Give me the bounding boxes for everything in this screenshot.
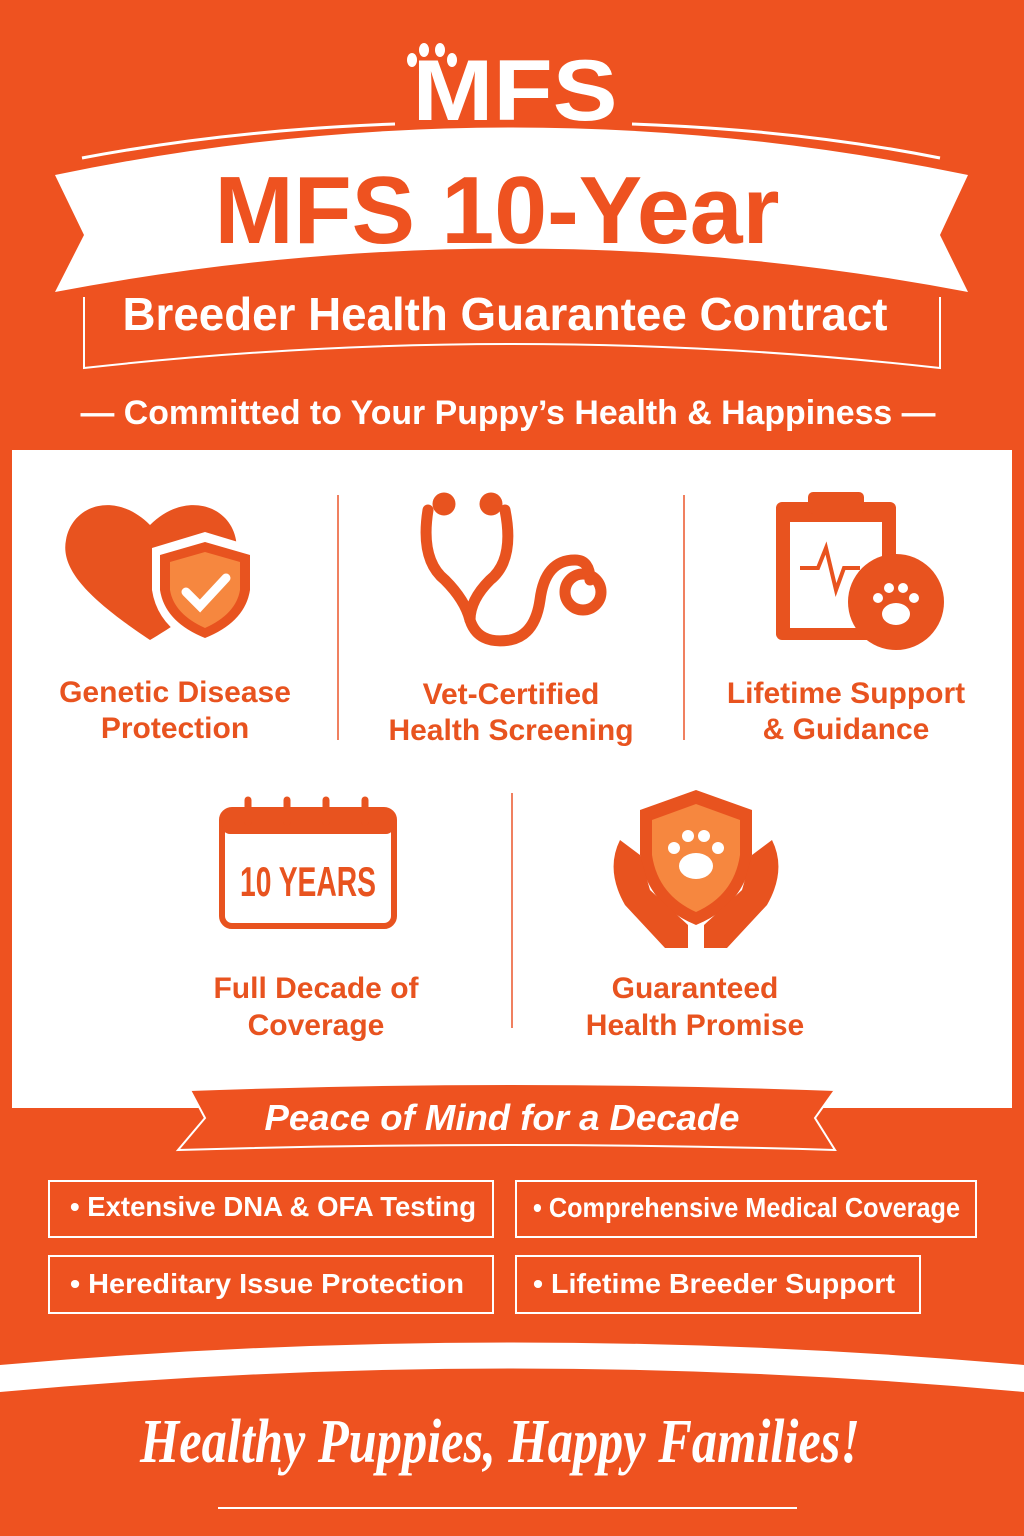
- label: Guaranteed Health Promise: Guaranteed: [612, 972, 778, 1005]
- bullet list text: • Hereditary Issue Protection: [70, 1268, 464, 1299]
- footer slogan: Healthy Puppies, Happy Families!: [139, 1408, 860, 1476]
- label: Full Decade of Coverage: Coverage: [248, 1009, 384, 1042]
- bullet list text: • Comprehensive Medical Coverage: [533, 1192, 960, 1223]
- subtitle box: Breeder Health Guarantee Contract: Breeder Health Guarantee Contract: [122, 288, 888, 340]
- title banner: MFS 10-Year: [55, 128, 968, 292]
- icon: stethoscope: [426, 498, 601, 641]
- label: Full Decade of Coverage: Full Decade of: [213, 972, 420, 1005]
- label: Vet-Certified Health Screening: Health Screening: [388, 714, 634, 747]
- bullet list text: • Extensive DNA & OFA Testing: [70, 1191, 476, 1222]
- title banner: MFS 10-Year: MFS 10-Year: [214, 157, 780, 264]
- label: Lifetime Support & Guidance: Lifetime Support: [727, 677, 965, 710]
- label: Vet-Certified Health Screening: Vet-Certified: [423, 678, 599, 711]
- logo: MFS with paw: MFS: [412, 43, 618, 139]
- subtitle box: Breeder Health Guarantee Contract: [84, 288, 940, 368]
- bullet list text: • Lifetime Breeder Support: [533, 1268, 895, 1299]
- bottom white wave: [0, 1342, 1024, 1392]
- label: Genetic Disease Protection: Protection: [101, 712, 249, 745]
- icon: heart with shield: [65, 505, 258, 648]
- label: Guaranteed Health Promise: Health Promise: [586, 1009, 804, 1042]
- icon: hands holding shield: [614, 790, 778, 948]
- bullet list text: [70, 1191, 960, 1299]
- label: Genetic Disease Protection: Genetic Disease: [59, 676, 291, 709]
- feature boxes: [49, 1181, 976, 1313]
- ribbon: Peace of Mind for a Decade: [178, 1084, 835, 1150]
- label: Lifetime Support & Guidance: & Guidance: [763, 713, 929, 746]
- panel: features: [12, 450, 1012, 1108]
- icon: 10 years calendar: 10 YEARS: [240, 858, 376, 905]
- icon: 10 years calendar: [222, 800, 394, 926]
- icon: clipboard with paw: [776, 492, 944, 650]
- ribbon: Peace of Mind for a Decade: Peace of Mind for a Decade: [264, 1097, 740, 1138]
- tagline: — Committed to Your Puppy’s Health & Happiness —: [80, 394, 936, 432]
